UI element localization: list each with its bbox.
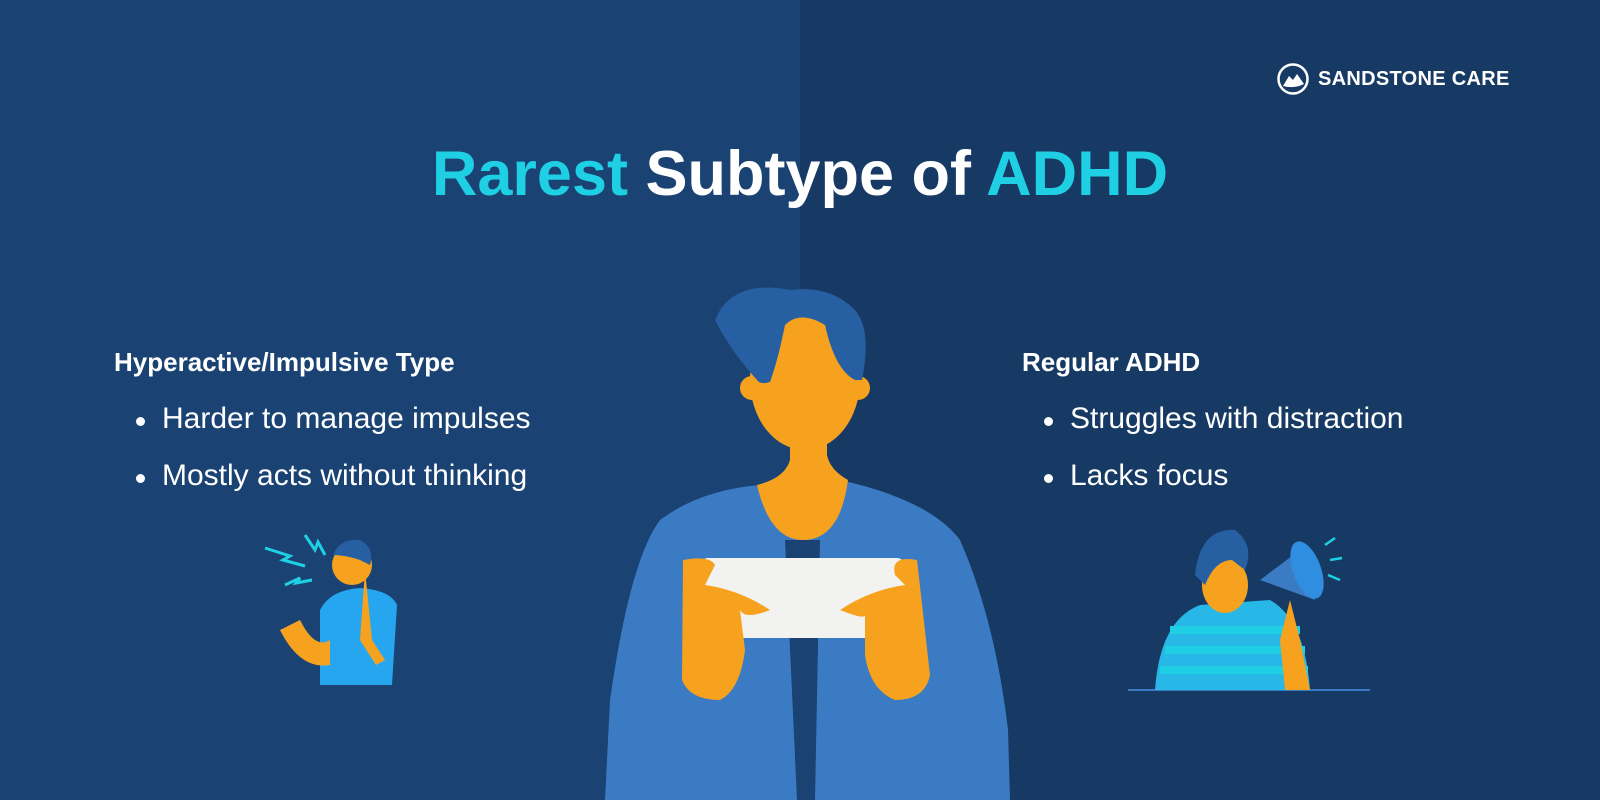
- bullets: hyperactive: Mostly acts without thinking: [162, 459, 527, 492]
- icon: person with megaphone: [1128, 530, 1370, 690]
- heading: hyperactive: Hyperactive/Impulsive Type: [114, 347, 455, 377]
- bullets: hyperactive: Harder to manage impulses: [162, 402, 531, 435]
- logo: SANDSTONE CARE: [1318, 68, 1510, 90]
- bullets: regular: Lacks focus: [1070, 459, 1228, 492]
- bullets: regular: Struggles with distraction: [1070, 402, 1404, 435]
- icon: angry person on phone: [265, 535, 397, 685]
- title: Rarest Subtype of ADHD: [432, 139, 1168, 209]
- heading: regular: Regular ADHD: [1022, 347, 1200, 377]
- logo: [1277, 63, 1510, 95]
- bullets: regular: [1044, 402, 1404, 492]
- bullets: hyperactive: [136, 402, 531, 492]
- panel: hyperactive: [114, 347, 531, 492]
- panel: regular: [1022, 347, 1404, 492]
